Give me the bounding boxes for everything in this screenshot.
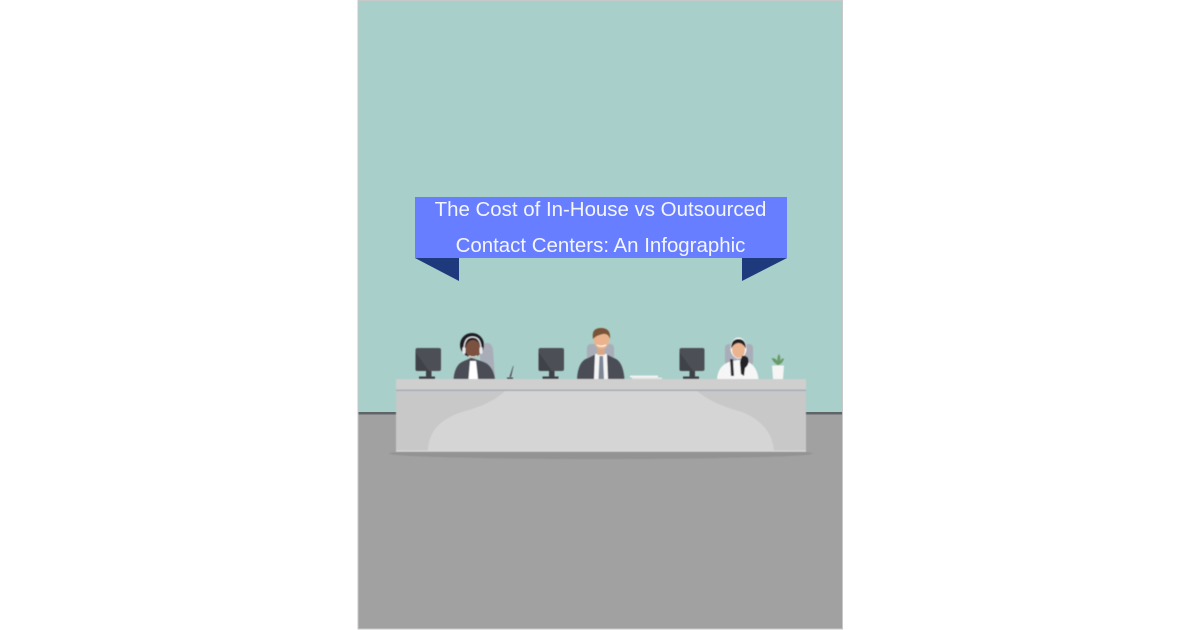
title banner <box>415 197 787 281</box>
monitor right <box>680 348 704 379</box>
banner right fold <box>742 258 787 281</box>
potted plant <box>772 354 784 379</box>
banner left fold <box>415 258 459 281</box>
cover page <box>358 0 842 629</box>
reception desk <box>396 379 806 452</box>
monitor left <box>416 348 441 379</box>
banner ribbon <box>415 197 787 258</box>
monitor centre <box>538 348 564 379</box>
title second line: Contact Centers: An Infographic <box>456 234 745 257</box>
agent left with headset <box>454 333 495 379</box>
agent right in white <box>717 338 758 379</box>
papers on desk <box>630 376 662 379</box>
desk shadow <box>389 448 813 459</box>
contact center scene <box>389 328 813 459</box>
agent centre in suit <box>577 328 624 379</box>
title: The Cost of In-House vs Outsourced <box>435 198 766 221</box>
desk microphone <box>507 366 514 379</box>
